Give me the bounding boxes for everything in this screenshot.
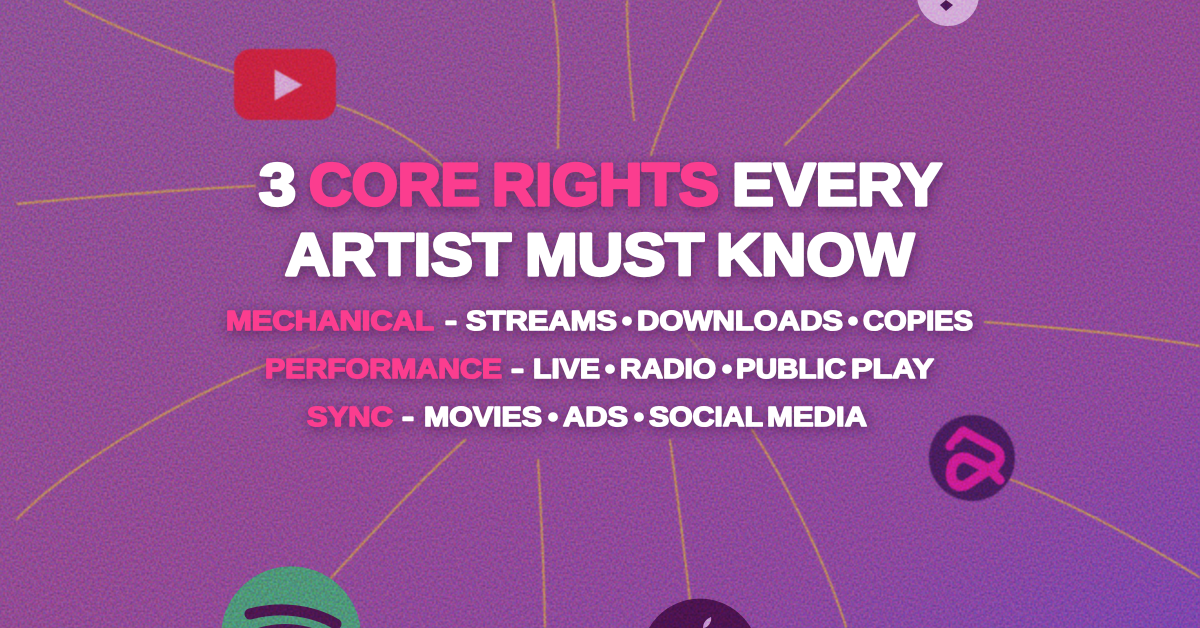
sync right: • <box>634 401 644 432</box>
title line 2: MUST <box>525 222 704 288</box>
mechanical right: • <box>848 305 858 336</box>
mechanical right: STREAMS <box>466 305 617 336</box>
sync right: - <box>402 401 414 432</box>
mechanical right: COPIES <box>863 305 973 336</box>
performance right: - <box>511 353 524 384</box>
title <box>259 152 942 288</box>
title line 1: 3 <box>259 152 296 218</box>
icon: Resso <box>929 415 1015 501</box>
icon: top-right disc <box>917 0 979 26</box>
title line 2: ARTIST <box>285 222 511 288</box>
mechanical right: DOWNLOADS <box>637 305 843 336</box>
title line 2 <box>285 222 914 288</box>
sync right: ADS <box>563 401 628 432</box>
title line 1: RIGHTS <box>492 152 719 218</box>
performance right: PLAY <box>851 353 934 384</box>
performance right: • <box>722 353 732 384</box>
mechanical right: MECHANICAL <box>226 305 434 336</box>
rights list <box>226 305 973 432</box>
performance right: LIVE <box>533 353 600 384</box>
title line 1 <box>259 152 942 218</box>
sync right: MEDIA <box>767 401 867 432</box>
icon: Spotify <box>222 566 360 628</box>
sync right: SYNC <box>307 401 393 432</box>
icon: dark music disc <box>649 599 751 628</box>
title line 1: EVERY <box>732 152 942 218</box>
sync right: MOVIES <box>424 401 542 432</box>
performance right: PUBLIC <box>736 353 846 384</box>
performance right: RADIO <box>620 353 716 384</box>
sync right: SOCIAL <box>649 401 763 432</box>
mechanical right <box>226 305 973 336</box>
mechanical right: - <box>445 305 457 336</box>
sync right: • <box>548 401 558 432</box>
icon: YouTube <box>234 49 336 120</box>
mechanical right: • <box>622 305 632 336</box>
performance right: PERFORMANCE <box>265 353 502 384</box>
performance right: • <box>605 353 615 384</box>
title line 1: CORE <box>309 152 480 218</box>
performance right <box>265 353 934 384</box>
title line 2: KNOW <box>716 222 914 288</box>
sync right <box>307 401 867 432</box>
